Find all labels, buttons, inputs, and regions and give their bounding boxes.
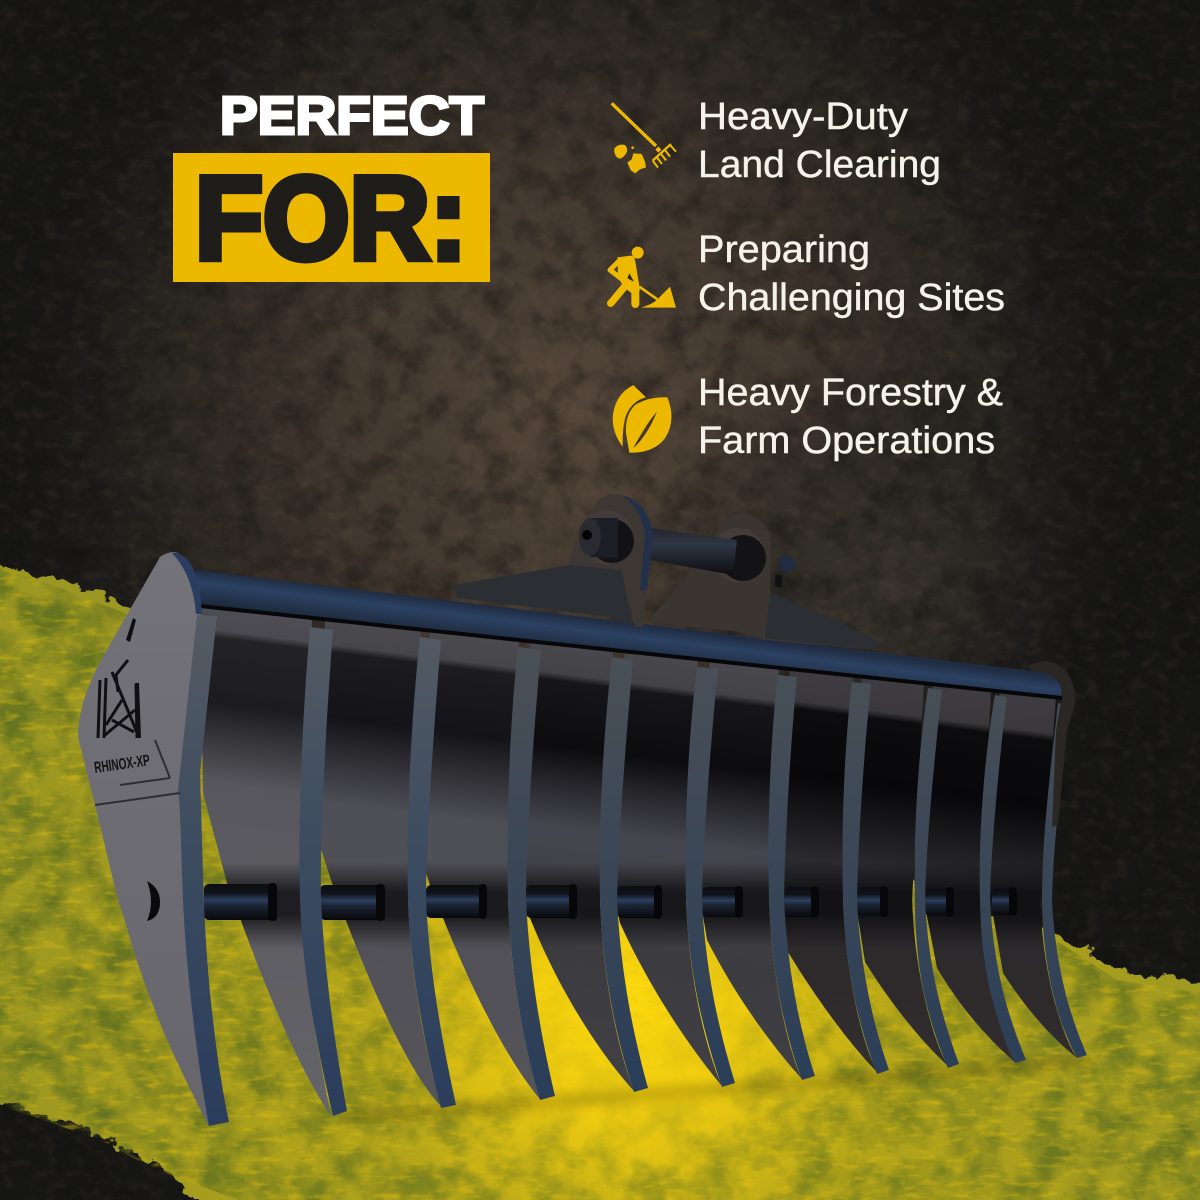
rake attachment (78, 494, 1087, 1126)
rear lug (647, 513, 877, 650)
cross tubes (204, 883, 1017, 921)
logo wordmark: RHINOX-XP (93, 752, 151, 777)
item: forestry and farm (613, 372, 1003, 462)
text: Heavy Forestry & Farm Operations: Farm Operations (698, 420, 995, 462)
icon: leaves (613, 385, 671, 453)
text: Heavy-Duty Land Clearing: Land Clearing (698, 144, 941, 186)
pin (650, 528, 737, 575)
item: preparing sites (610, 229, 1005, 319)
mounting lugs and pin (453, 494, 877, 650)
front lug (567, 494, 653, 627)
yellow paint swath (0, 558, 1200, 1200)
text: Heavy Forestry & Farm Operations (698, 372, 1003, 462)
item: land clearing (612, 96, 941, 186)
text: Heavy-Duty Land Clearing: Heavy-Duty (698, 96, 908, 138)
text: Preparing Challenging Sites (698, 229, 1005, 319)
yellow label box (173, 153, 490, 282)
front plate (453, 565, 633, 627)
heading word: PERFECT: PERFECT (220, 86, 484, 146)
top bar (195, 570, 1075, 827)
side plate (78, 552, 229, 1126)
use case list (610, 96, 1005, 462)
heading word: FOR:: FOR: (195, 153, 467, 285)
title: PERFECT FOR: (173, 86, 490, 285)
icon: worker shoveling (610, 247, 676, 308)
logo (98, 660, 139, 738)
text: Heavy-Duty Land Clearing (698, 96, 941, 186)
icon: rake and rocks (612, 103, 676, 173)
text: Heavy Forestry & Farm Operations: Heavy Forestry & (698, 372, 1003, 414)
text: Preparing Challenging Sites: Challenging Sites (698, 277, 1005, 319)
tine edge strips (299, 627, 1087, 1116)
tine plates (200, 605, 1080, 1116)
text: Preparing Challenging Sites: Preparing (698, 229, 870, 271)
